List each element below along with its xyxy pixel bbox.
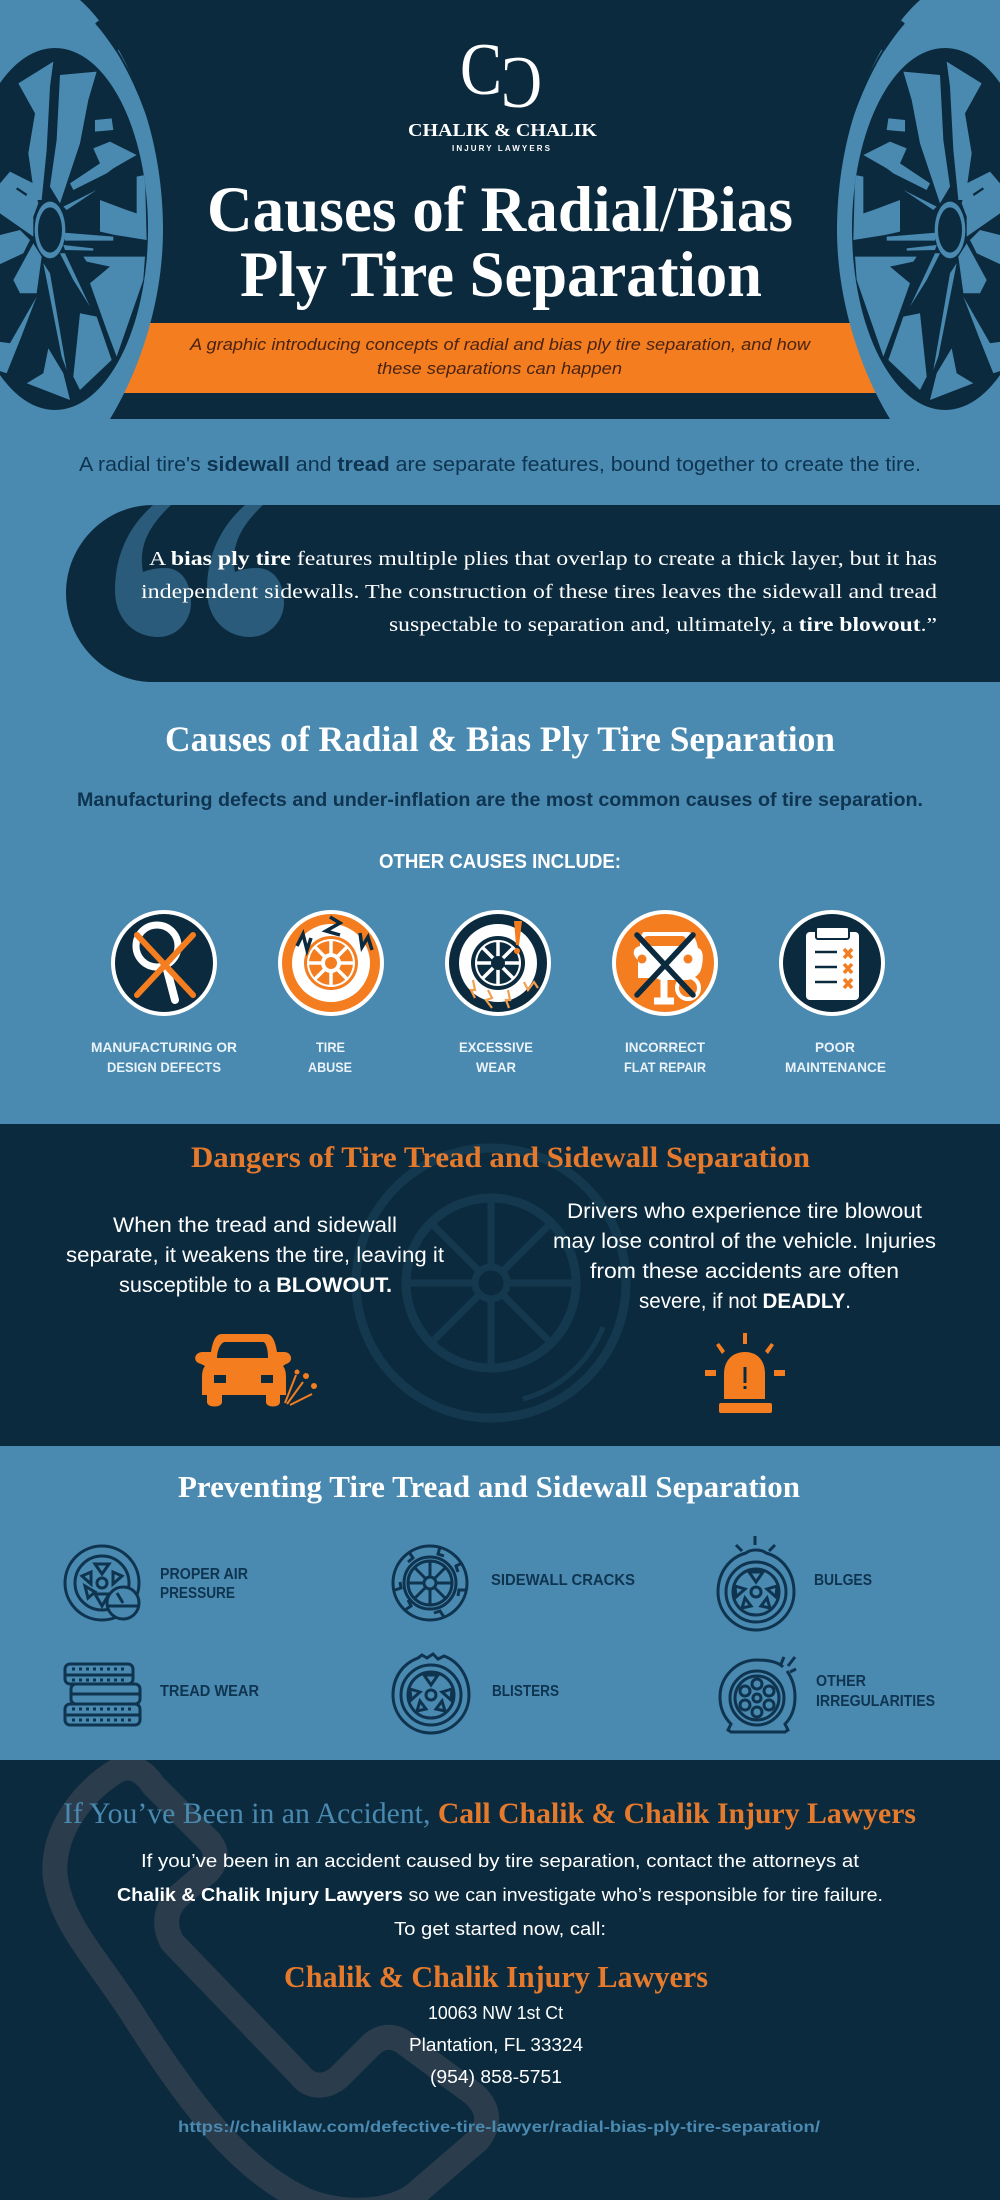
cause labels: EXCESSIVE: [459, 1039, 533, 1055]
subtitle: these separations can happen: [377, 359, 622, 378]
address: [409, 2003, 583, 2087]
cause labels: TIRE: [316, 1039, 345, 1055]
icon: quotation marks: [115, 505, 284, 637]
orange subtitle band: [100, 323, 900, 393]
firm name: Chalik & Chalik Injury Lawyers: [284, 1959, 708, 1994]
heading: contact: If You’ve Been in an Accident, Call Chalik & Chalik Injury Lawyers: [63, 1797, 916, 1830]
prevention labels: OTHER: [816, 1673, 866, 1690]
cause labels: [91, 1039, 886, 1075]
causes statement: Manufacturing defects and under-inflation are the most common causes of tire separation.: [77, 790, 923, 811]
prevention labels: PROPER AIR: [160, 1566, 248, 1583]
address: Plantation, FL 33324: [409, 2035, 583, 2055]
text: blowout: separate, it weakens the tire, leaving it: [66, 1244, 444, 1267]
heading: causes: Causes of Radial & Bias Ply Tire Separation: [165, 719, 835, 759]
contact paragraph: To get started now, call:: [394, 1919, 606, 1939]
subtitle: [189, 335, 812, 378]
text: deadly: severe, if not DEADLY.: [639, 1290, 851, 1313]
address: (954) 858-5751: [430, 2067, 562, 2087]
icon: alarm: [705, 1333, 785, 1413]
icon: proper air pressure: [65, 1546, 139, 1620]
quote text: independent sidewalls. The construction of these tires leaves the sidewall and tread: [141, 581, 937, 603]
text: deadly: may lose control of the vehicle. Injuries: [553, 1230, 936, 1253]
contact paragraph: [117, 1851, 883, 1939]
text: deadly: Drivers who experience tire blowout: [567, 1200, 922, 1223]
icon: excessive wear: [445, 910, 551, 1016]
text: deadly: from these accidents are often: [590, 1260, 899, 1283]
cause labels: ABUSE: [308, 1059, 352, 1075]
icon: tread wear: [65, 1664, 140, 1725]
contact paragraph: Chalik & Chalik Injury Lawyers so we can investigate who’s responsible for tire failure.: [117, 1885, 883, 1905]
prevention labels: BLISTERS: [492, 1683, 559, 1700]
heading: dangers: Dangers of Tire Tread and Sidewall Separation: [191, 1141, 810, 1174]
address: 10063 NW 1st Ct: [428, 2003, 563, 2023]
icon: car blowout: [195, 1334, 317, 1406]
icon: poor maintenance: [779, 910, 885, 1016]
logo: C: [501, 42, 542, 124]
logo: [408, 29, 597, 153]
logo: CHALIK & CHALIK: [408, 120, 597, 140]
icon: bulges: [718, 1536, 794, 1630]
quote text: A bias ply tire features multiple plies that overlap to create a thick layer, but it has: [149, 548, 937, 570]
tire illustration: left: [0, 0, 163, 419]
intro text: A radial tire's sidewall and tread are separate features, bound together to create the tire.: [79, 454, 921, 476]
heading: preventing: Preventing Tire Tread and Sidewall Separation: [178, 1469, 800, 1504]
icon: watermark phone: [55, 1768, 487, 2200]
cause labels: MAINTENANCE: [785, 1059, 886, 1075]
text: deadly: [553, 1200, 936, 1313]
logo: C: [460, 29, 502, 111]
cause labels: INCORRECT: [625, 1039, 705, 1055]
text: blowout: When the tread and sidewall: [113, 1214, 397, 1237]
logo: INJURY LAWYERS: [452, 144, 551, 153]
cause labels: FLAT REPAIR: [624, 1059, 706, 1075]
cause labels: DESIGN DEFECTS: [107, 1059, 221, 1075]
prevention labels: BULGES: [814, 1572, 872, 1589]
title: [207, 174, 793, 311]
icon: manufacturing defects: [111, 910, 217, 1016]
quote text: suspectable to separation and, ultimately, a tire blowout .”: [389, 614, 937, 636]
prevention labels: PRESSURE: [160, 1585, 235, 1602]
subtitle: A graphic introducing concepts of radial and bias ply tire separation, and how: [189, 335, 812, 354]
other causes label: OTHER CAUSES INCLUDE:: [379, 851, 621, 873]
panel: contact: [0, 1760, 1000, 2200]
icon: tire abuse: [278, 910, 384, 1016]
panel: dangers: [0, 1124, 1000, 1446]
text: blowout: susceptible to a BLOWOUT.: [119, 1274, 392, 1297]
quote text: [141, 548, 937, 636]
cause labels: POOR: [815, 1039, 855, 1055]
prevention labels: SIDEWALL CRACKS: [491, 1572, 635, 1589]
icon: other irregularities: [720, 1657, 796, 1732]
text: blowout: [66, 1214, 444, 1297]
source url: https://chaliklaw.com/defective-tire-lawyer/radial-bias-ply-tire-separation/: [178, 2119, 821, 2136]
title: Ply Tire Separation: [240, 239, 762, 311]
prevention labels: TREAD WEAR: [160, 1683, 259, 1700]
icon: sidewall cracks: [393, 1546, 467, 1620]
icon: blisters: [393, 1654, 469, 1733]
tire illustration: right: [837, 0, 1000, 419]
contact paragraph: If you’ve been in an accident caused by tire separation, contact the attorneys at: [141, 1851, 859, 1871]
prevention labels: [160, 1566, 935, 1710]
icon: watermark wheel: [356, 1148, 626, 1418]
icon: incorrect flat repair: [612, 910, 718, 1016]
cause labels: MANUFACTURING OR: [91, 1039, 237, 1055]
prevention labels: IRREGULARITIES: [816, 1693, 935, 1710]
panel: quote: [66, 505, 1000, 682]
title: Causes of Radial/Bias: [207, 174, 793, 246]
cause labels: WEAR: [476, 1059, 516, 1075]
header panel: [0, 0, 1000, 419]
